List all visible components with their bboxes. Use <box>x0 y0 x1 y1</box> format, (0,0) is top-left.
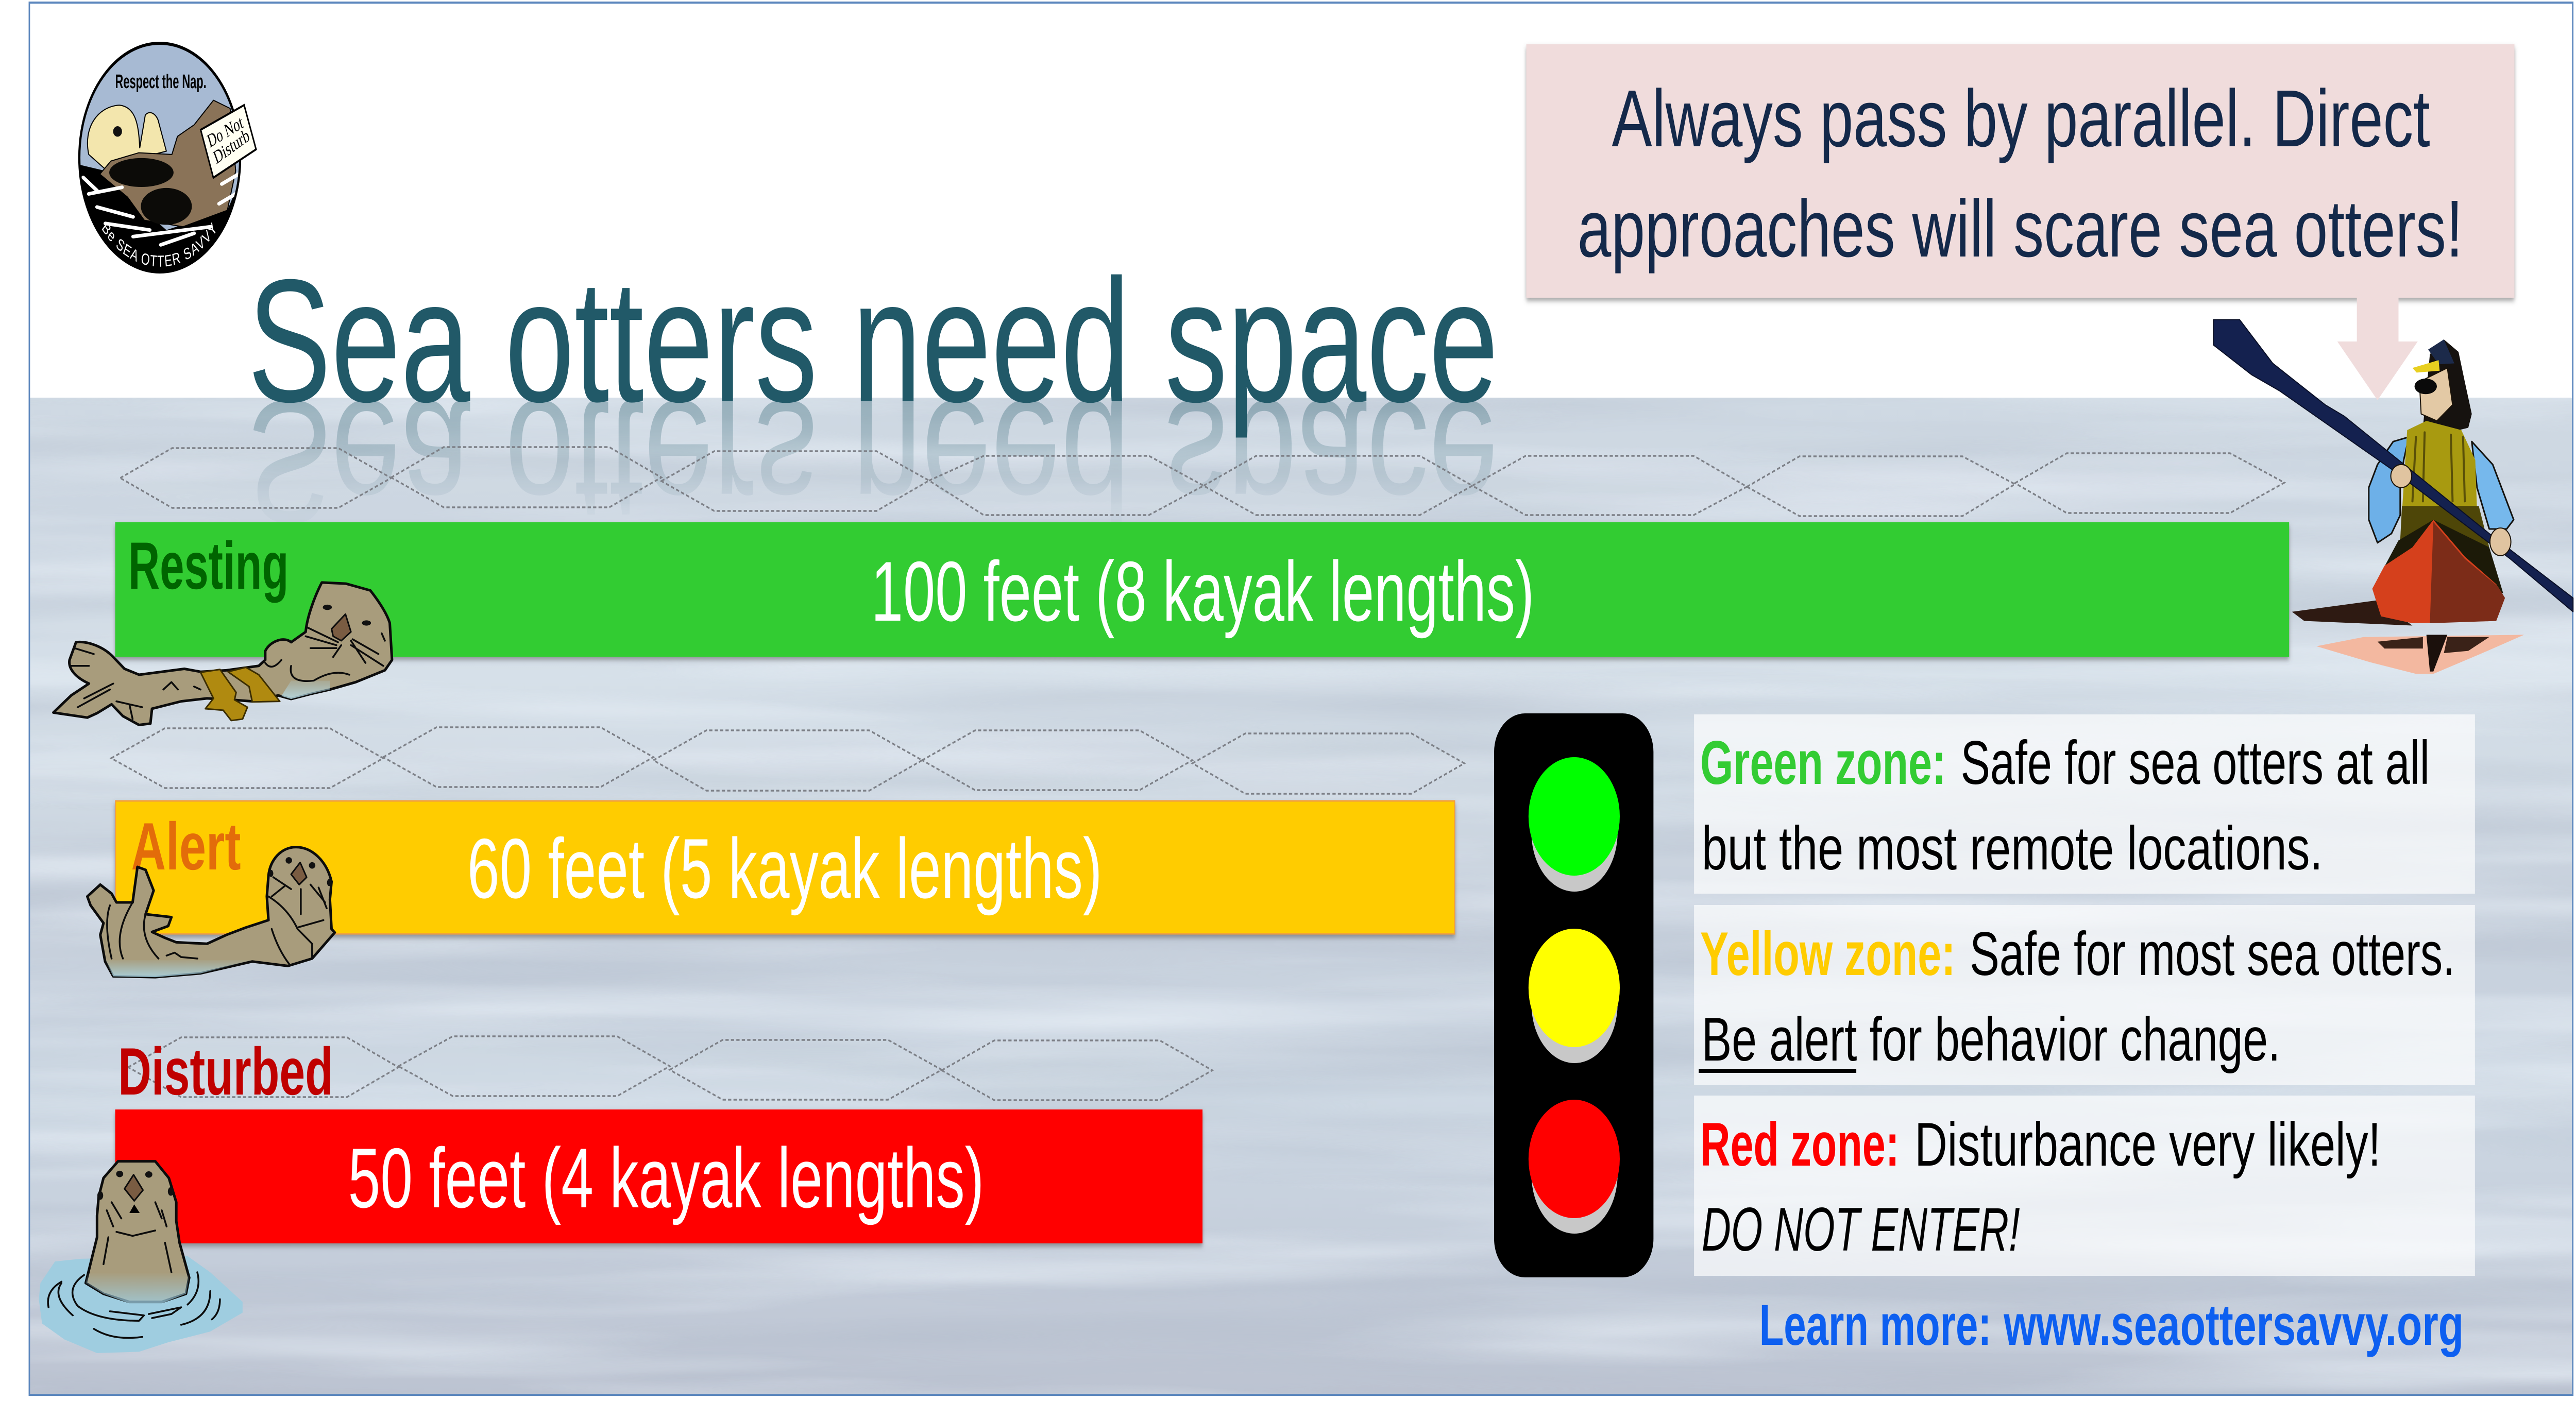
yellow lamp <box>1529 929 1620 1063</box>
panel: red zone: Red zone: <box>1700 1109 1900 1178</box>
bar: alert 60 feet <box>115 801 1454 934</box>
logo disc <box>80 45 239 270</box>
bar: disturbed 50 feet <box>115 1109 1202 1243</box>
callout text: Always pass by parallel. Direct <box>1612 73 2430 164</box>
face and cap <box>2419 368 2452 421</box>
callout box <box>1527 44 2514 298</box>
panel: green zone: Green zone: <box>1700 728 1946 797</box>
logo badge: respect the nap <box>78 42 257 274</box>
hands <box>2391 465 2412 488</box>
arrow: callout to kayaker <box>2337 271 2418 400</box>
sleeves <box>2369 437 2409 543</box>
water splash <box>39 1256 243 1353</box>
skirt <box>2378 520 2503 593</box>
panel: yellow zone <box>1694 905 2475 1085</box>
bar label: alert: Alert <box>131 809 241 884</box>
background: water surface <box>29 398 2573 1395</box>
green lamp <box>1529 757 1620 892</box>
panel: green zone <box>1694 714 2475 894</box>
bar value text: 100 feet (8 kayak lengths) <box>871 544 1534 639</box>
icon: alert otter raising head <box>88 847 335 977</box>
link: learn more: Learn more: <box>1759 1292 1991 1357</box>
logo text: respect the nap: Respect the Nap. <box>115 70 207 92</box>
sign: do not disturb: Disturb <box>211 125 252 168</box>
title reflection: Sea otters need space <box>248 363 1498 559</box>
bar: resting 100 feet <box>115 522 2289 657</box>
title: sea otters need space <box>248 243 1498 559</box>
bar label: resting: Resting <box>128 528 289 603</box>
link: learn more <box>1759 1292 2464 1357</box>
logo text: slogan ring: Be SEA OTTER SAVVY <box>102 221 215 267</box>
traffic light <box>1494 713 1653 1277</box>
link: learn more: www.seaottersavvy.org <box>2003 1292 2464 1357</box>
panel: green zone: but the most remote locations. <box>1702 813 2323 882</box>
sign: do not disturb: Do Not <box>205 112 245 151</box>
panel: green zone: Safe for sea otters at all <box>1961 728 2430 797</box>
kayak hull <box>2372 520 2505 623</box>
panel: red zone <box>1694 1096 2475 1276</box>
kayak shadow and reflection <box>2292 600 2413 625</box>
panel: red zone: DO NOT ENTER! <box>1702 1194 2020 1263</box>
panel: yellow zone: Safe for most sea otters. <box>1970 919 2455 988</box>
callout: always pass by parallel <box>1527 44 2514 298</box>
panel: yellow zone: Be alert for behavior change. <box>1702 1004 2280 1073</box>
callout text <box>1578 73 2463 274</box>
paddle <box>2213 320 2573 612</box>
icon: kayaker with paddle <box>2213 320 2573 674</box>
kayak length hexagons: resting <box>120 447 2284 516</box>
housing <box>1494 713 1653 1277</box>
kayak length hexagons: alert <box>111 727 1464 794</box>
logo outline <box>79 43 240 272</box>
label: disturbed: Disturbed <box>118 1034 333 1109</box>
kayak length hexagons: disturbed <box>128 1036 1212 1100</box>
bar value text: 60 feet (5 kayak lengths) <box>467 822 1102 916</box>
red lamp <box>1529 1100 1620 1234</box>
life vest <box>2400 421 2489 548</box>
callout text: approaches will scare sea otters! <box>1578 183 2463 274</box>
sign: do not disturb <box>200 105 256 178</box>
icon: resting otter floating on back <box>54 583 392 725</box>
icon: disturbed otter in water <box>39 1161 243 1353</box>
bar value text: 50 feet (4 kayak lengths) <box>348 1131 984 1226</box>
panel: yellow zone: Yellow zone: <box>1700 919 1956 988</box>
hair <box>2423 339 2472 435</box>
title text: Sea otters need space <box>248 243 1498 439</box>
panel: red zone: Disturbance very likely! <box>1914 1109 2381 1178</box>
